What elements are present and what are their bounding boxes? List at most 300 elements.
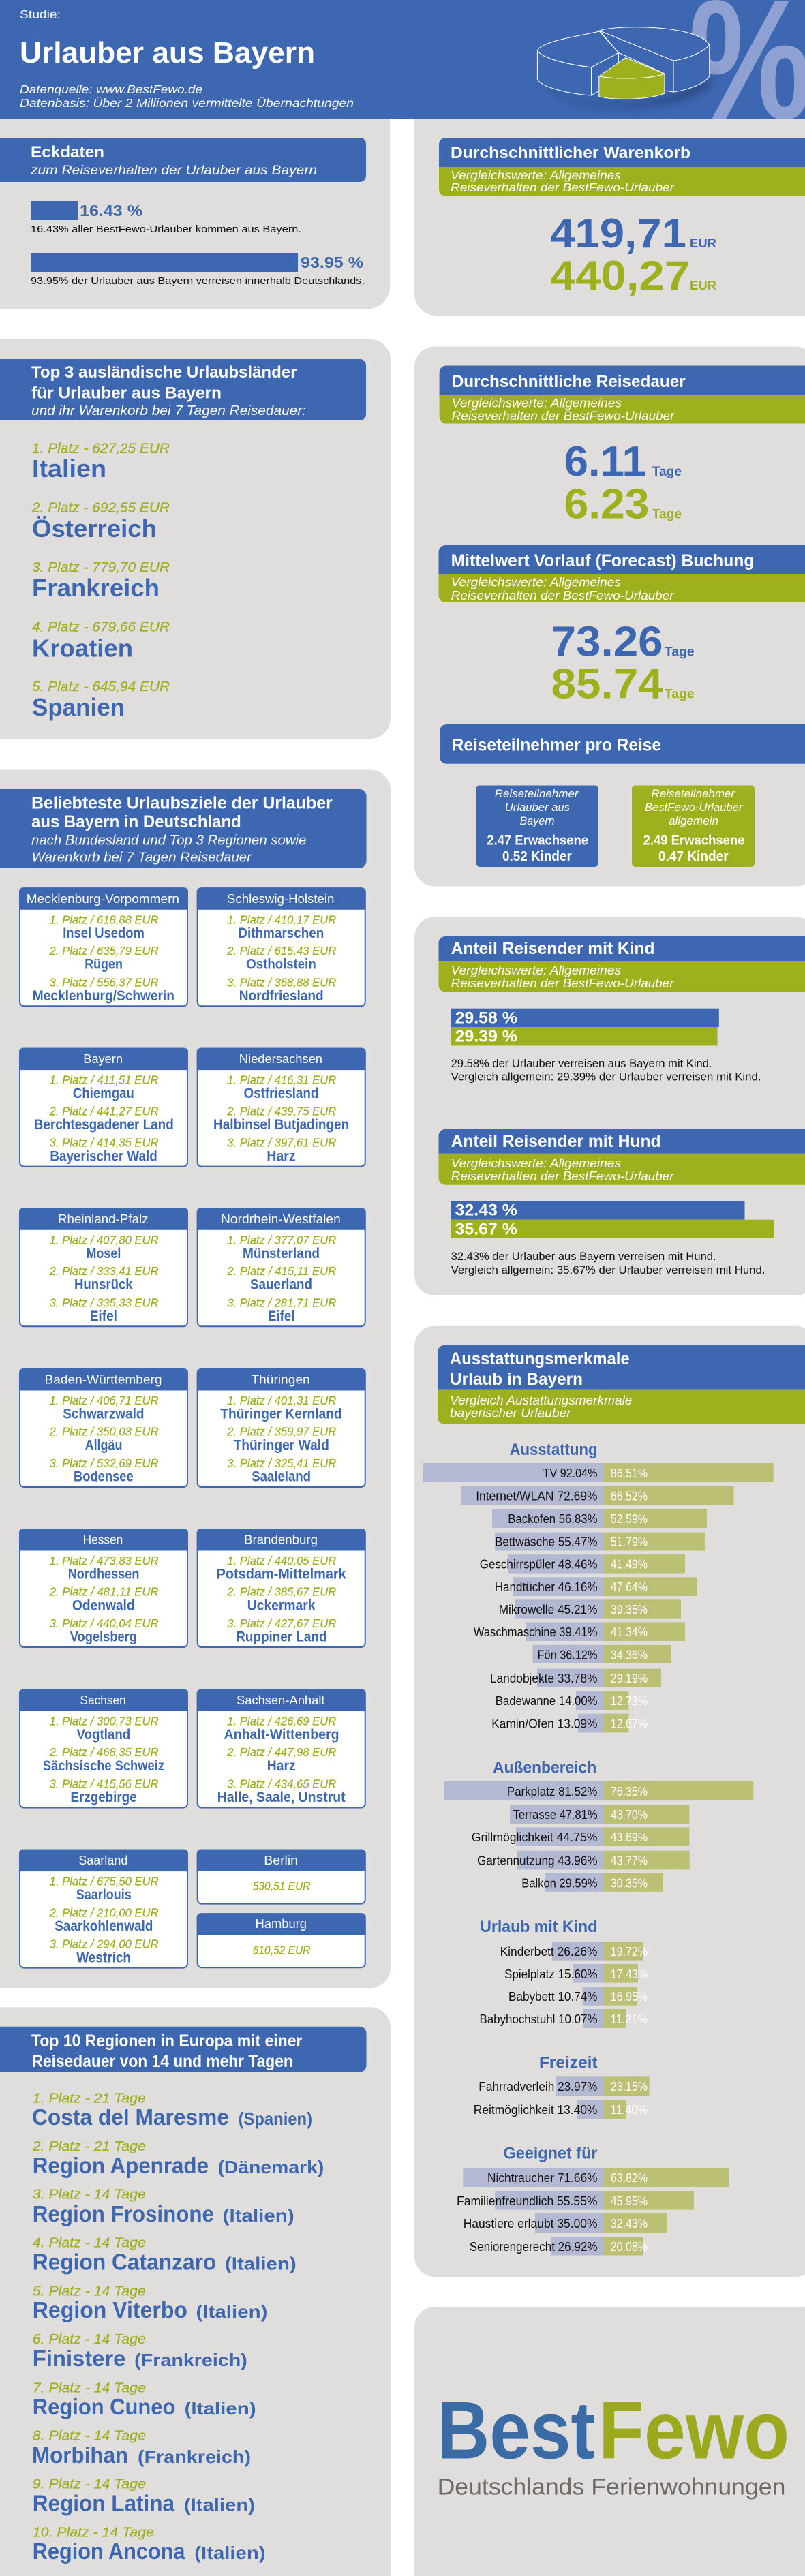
heading: Warenkorb: Durchschnittlicher Warenkorb [451, 144, 690, 162]
rank 3: Region Frosinone: (Italien) [223, 2205, 294, 2226]
chart: Ausstattung: 86.51% [611, 1467, 648, 1480]
card: Bayern: Chiemgau [73, 1086, 134, 1101]
rank 1: Costa del Maresme [32, 2091, 312, 2130]
rank 7: Region Cuneo: Region Cuneo [33, 2394, 175, 2419]
heading: Warenkorb: Vergleichswerte: Allgemeines [451, 168, 621, 182]
heading: Beliebteste Urlaubsziele: aus Bayern in Deutschland [31, 812, 241, 831]
card: Schleswig-Holstein: 3. Platz / 368,88 EUR [227, 975, 337, 989]
chart: Außenbereich: Gartennutzung 43.96% [477, 1854, 597, 1867]
data source: Datenquelle: www.BestFewo.de [20, 82, 202, 96]
heading: Beliebteste Urlaubsziele: Warenkorb bei 7 Tagen Reisedauer [31, 849, 252, 865]
card: Nordrhein-Westfalen: 2. Platz / 415,11 EUR [226, 1264, 337, 1278]
heading: Warenkorb: Reiseverhalten der BestFewo-Urlauber [451, 181, 675, 194]
card: Hessen: 1. Platz / 473,83 EUR [50, 1554, 159, 1567]
value: 6.11 Tage: 6.11 [564, 438, 646, 485]
caption: Kind: Vergleich allgemein: 29.39% der Urlauber verreisen mit Kind. [451, 1071, 761, 1084]
box: BestFewo-Urlauber allgemein: Reiseteilnehmer [652, 787, 735, 800]
bars: Hund [451, 1201, 774, 1239]
value: 73.26 Tage: 73.26 [551, 619, 663, 666]
chart: Ausstattung: 51.79% [611, 1535, 648, 1548]
card: Hessen: 3. Platz / 440,04 EUR [50, 1616, 159, 1630]
panel: Eckdaten [0, 119, 390, 309]
rank 8: Morbihan: (Frankreich) [138, 2447, 251, 2467]
chart: Außenbereich: 43.77% [611, 1854, 648, 1867]
chart: Ausstattung: Mikrowelle 45.21% [499, 1603, 597, 1616]
rank 3: Frankreich: Frankreich [32, 574, 160, 602]
card: Sachsen: 2. Platz / 468,35 EUR [49, 1745, 159, 1759]
chart: Freizeit: Reitmöglichkeit 13.40% [474, 2103, 597, 2117]
heading: Ausstattungsmerkmale: bayerischer Urlauber [450, 1406, 571, 1420]
chart: Freizeit: Freizeit [539, 2054, 597, 2072]
card: Rheinland-Pfalz: 3. Platz / 335,33 EUR [50, 1295, 159, 1309]
heading: Beliebteste Urlaubsziele [0, 789, 367, 868]
card: Sachsen-Anhalt: 2. Platz / 447,98 EUR [226, 1745, 337, 1759]
card: Niedersachsen: Ostfriesland [244, 1086, 318, 1101]
card: Saarland: 1. Platz / 675,50 EUR [50, 1875, 159, 1888]
card: Mecklenburg-Vorpommern: Mecklenburg/Schwerin [33, 988, 174, 1004]
card: Mecklenburg-Vorpommern: 2. Platz / 635,79 EUR [49, 944, 159, 957]
chart: Ausstattung: Fön 36.12% [538, 1648, 597, 1661]
chart: Ausstattung: 41.34% [611, 1625, 648, 1639]
chart: Geeignet für: 63.82% [611, 2171, 648, 2185]
rank 7: Region Cuneo [33, 2380, 256, 2419]
heading: Anteil Reisender mit Kind: Vergleichswerte: Allgemeines [451, 964, 621, 977]
box: Urlauber aus Bayern: 2.47 Erwachsene [487, 833, 588, 848]
chart: Ausstattung: Landobjekte 33.78% [490, 1672, 597, 1685]
heading: Top 10 Regionen [0, 2027, 367, 2072]
card: Sachsen [19, 1689, 188, 1807]
card: Hessen: Nordhessen [68, 1566, 139, 1582]
card: Sachsen: 3. Platz / 415,56 EUR [50, 1777, 159, 1791]
rank 2: Region Apenrade: (Dänemark) [218, 2157, 324, 2177]
rank 6: Finistere: Finistere [33, 2346, 125, 2371]
heading: Eckdaten [0, 138, 366, 182]
card: Schleswig-Holstein: Ostholstein [246, 957, 316, 972]
card: Thüringen: Thüringen [252, 1373, 310, 1386]
chart: Ausstattung: 39.35% [611, 1603, 648, 1616]
card: Niedersachsen: Harz [267, 1148, 296, 1164]
rank 9: Region Latina [33, 2477, 255, 2516]
chart: Freizeit: 23.15% [611, 2080, 648, 2094]
bar: 16.43 percent [31, 201, 301, 235]
card: Hessen: Vogelsberg [70, 1629, 137, 1645]
rank 9: Region Latina: (Italien) [184, 2494, 255, 2515]
card: Brandenburg: Brandenburg [244, 1532, 318, 1547]
card: Sachsen-Anhalt [197, 1689, 366, 1807]
card: Schleswig-Holstein: Schleswig-Holstein [227, 891, 334, 906]
chart: Geeignet für: Haustiere erlaubt 35.00% [464, 2217, 597, 2230]
card: Schleswig-Holstein [197, 887, 366, 1006]
chart: Freizeit: Fahrradverleih 23.97% [479, 2080, 597, 2094]
value: 6.11 Tage [564, 438, 682, 485]
card: Rheinland-Pfalz: 2. Platz / 333,41 EUR [49, 1264, 159, 1278]
heading: Ausstattungsmerkmale: Urlaub in Bayern [450, 1370, 583, 1389]
card: Schleswig-Holstein: Nordfriesland [239, 988, 324, 1004]
card: Sachsen-Anhalt: Sachsen-Anhalt [237, 1693, 325, 1707]
value: 6.11 Tage: Tage [652, 465, 682, 479]
chart: Ausstattung: 34.36% [611, 1648, 648, 1661]
card: Baden-Württemberg: 3. Platz / 532,69 EUR [50, 1456, 159, 1470]
rank 6: Finistere: 6. Platz - 14 Tage [33, 2332, 146, 2347]
main title: Urlauber aus Bayern [20, 36, 315, 70]
rank 6: Finistere [33, 2332, 247, 2371]
rank 10: Region Ancona: (Italien) [194, 2543, 265, 2563]
card: Brandenburg: 1. Platz / 440,05 EUR [227, 1554, 337, 1567]
box: Urlauber aus Bayern [476, 785, 598, 867]
rank 8: Morbihan: 8. Platz - 14 Tage [33, 2429, 146, 2444]
heading: Anteil Reisender mit Kind: Anteil Reisender mit Kind [451, 939, 654, 958]
study label: Studie: [20, 7, 61, 21]
card: Baden-Württemberg: Baden-Württemberg [45, 1373, 162, 1386]
chart: Ausstattung: 47.64% [611, 1580, 648, 1594]
rank 3: Region Frosinone [33, 2188, 294, 2226]
chart: Urlaub mit Kind: 16.95% [611, 1990, 648, 2004]
card: Sachsen: Erzgebirge [71, 1790, 137, 1805]
chart: Ausstattung: Waschmaschine 39.41% [474, 1625, 597, 1639]
caption: Hund: 32.43% der Urlauber aus Bayern verreisen mit Hund. [451, 1251, 716, 1263]
rank 2: Region Apenrade: Region Apenrade [33, 2153, 209, 2178]
chart: Ausstattung [423, 1441, 774, 1732]
card: Hamburg: 610,52 EUR [253, 1943, 311, 1957]
chart: Außenbereich [444, 1758, 753, 1892]
card: Berlin [197, 1850, 366, 1904]
card: Niedersachsen: 2. Platz / 439,75 EUR [226, 1104, 337, 1118]
rank 4: Region Catanzaro: Region Catanzaro [33, 2249, 216, 2275]
rank 3: Frankreich: 3. Platz - 779,70 EUR [32, 559, 170, 575]
box: Urlauber aus Bayern: Reiseteilnehmer [495, 787, 579, 800]
chart: Geeignet für: 45.95% [611, 2194, 648, 2208]
card: Mecklenburg-Vorpommern: 1. Platz / 618,88 EUR [50, 913, 159, 926]
rank 5: Region Viterbo: 5. Platz - 14 Tage [33, 2284, 146, 2299]
card: Saarland: Saarland [78, 1853, 127, 1867]
card: Rheinland-Pfalz [19, 1208, 188, 1326]
panel: Ausstattungsmerkmale [414, 1326, 805, 2277]
box: Urlauber aus Bayern: 0.52 Kinder [502, 849, 572, 864]
card: Bayern: 1. Platz / 411,51 EUR [50, 1073, 159, 1087]
chart: Urlaub mit Kind: Urlaub mit Kind [480, 1918, 597, 1936]
chart: Ausstattung: 41.49% [611, 1557, 648, 1571]
chart: Geeignet für: 20.08% [611, 2240, 648, 2254]
rank 4: Region Catanzaro: (Italien) [225, 2253, 297, 2273]
heading: Warenkorb [439, 138, 805, 196]
card: Nordrhein-Westfalen: Münsterland [243, 1246, 320, 1261]
card: Hessen: Hessen [83, 1532, 123, 1547]
card: Sachsen: Sachsen [80, 1693, 126, 1707]
rank 7: Region Cuneo: (Italien) [185, 2398, 256, 2419]
card: Brandenburg: Uckermark [247, 1597, 316, 1613]
chart: Ausstattung: Internet/WLAN 72.69% [476, 1490, 597, 1503]
card: Bayern [19, 1048, 188, 1167]
bar: 93.95 percent: 93.95 % [301, 254, 363, 271]
chart: Außenbereich: Parkplatz 81.52% [507, 1785, 597, 1798]
heading: Mittelwert Vorlauf [439, 545, 805, 602]
logo: BestFewo: Fewo [598, 2385, 789, 2477]
card: Niedersachsen: Halbinsel Butjadingen [213, 1117, 349, 1133]
panel: Reisedauer, Vorlauf, Reiseteilnehmer [414, 346, 805, 886]
card: Nordrhein-Westfalen: 1. Platz / 377,07 EUR [227, 1233, 337, 1246]
heading: Top 3 [0, 359, 366, 420]
chart: Ausstattung: 52.59% [611, 1512, 648, 1526]
icon: 3D pie chart [537, 27, 716, 106]
card: Bayern: Berchtesgadener Land [34, 1117, 174, 1133]
chart: Geeignet für: Seniorengerecht 26.92% [470, 2240, 597, 2254]
value: 85.74 Tage: Tage [665, 688, 695, 702]
heading: Eckdaten: Eckdaten [31, 143, 104, 162]
card: Rheinland-Pfalz: Eifel [90, 1308, 117, 1324]
card: Bayern: 3. Platz / 414,35 EUR [50, 1136, 159, 1150]
rank 5: Region Viterbo: (Italien) [196, 2301, 267, 2322]
heading: Durchschnittliche Reisedauer [440, 365, 805, 424]
value: 6.23 Tage: 6.23 [564, 480, 649, 527]
bar: 93.95 percent: 93.95% der Urlauber aus Bayern verreisen innerhalb Deutschlands. [31, 276, 365, 287]
rank 4: Kroatien: Kroatien [32, 634, 133, 662]
panel: Warenkorb [414, 119, 805, 316]
heading: Ausstattungsmerkmale [438, 1345, 805, 1424]
rank 1: Italien [32, 440, 170, 482]
box: BestFewo-Urlauber allgemein: BestFewo-Urlauber [645, 801, 744, 814]
card: Saarland: Saarlouis [76, 1887, 132, 1903]
heading: Durchschnittliche Reisedauer: Reiseverhalten der BestFewo-Urlauber [452, 410, 675, 423]
chart: Ausstattung: Backofen 56.83% [508, 1512, 597, 1526]
box: BestFewo-Urlauber allgemein: 0.47 Kinder [658, 849, 729, 864]
rank 9: Region Latina: 9. Platz - 14 Tage [33, 2477, 146, 2491]
card: Nordrhein-Westfalen: 3. Platz / 281,71 EUR [227, 1295, 337, 1309]
box: Urlauber aus Bayern: Bayern [520, 814, 555, 827]
rank 4: Kroatien: 4. Platz - 679,66 EUR [32, 619, 170, 635]
rank 5: Spanien [32, 679, 170, 721]
logo: BestFewo: Best [437, 2385, 595, 2477]
rank 10: Region Ancona: Region Ancona [33, 2539, 185, 2564]
box: BestFewo-Urlauber allgemein [632, 785, 755, 867]
rank 5: Spanien: Spanien [32, 693, 125, 721]
card: Thüringen: Thüringer Wald [234, 1437, 329, 1453]
heading: Top 10 Regionen: Top 10 Regionen in Europa mit einer [31, 2031, 303, 2051]
chart: Ausstattung: Geschirrspüler 48.46% [480, 1557, 597, 1571]
chart: Urlaub mit Kind: Babyhochstuhl 10.07% [480, 2012, 597, 2026]
card: Mecklenburg-Vorpommern: 3. Platz / 556,37 EUR [50, 975, 159, 989]
value: 419,71 EUR: EUR [690, 236, 716, 250]
card: Baden-Württemberg [19, 1368, 188, 1487]
rank 8: Morbihan [32, 2429, 251, 2468]
chart: Geeignet für: Familienfreundlich 55.55% [457, 2194, 597, 2208]
box: Urlauber aus Bayern: Urlauber aus [505, 801, 570, 814]
card: Niedersachsen: Niedersachsen [239, 1052, 322, 1066]
card: Sachsen-Anhalt: Anhalt-Wittenberg [224, 1727, 339, 1743]
value: 440,27 EUR: 440,27 [550, 253, 690, 298]
rank 2: Region Apenrade: 2. Platz - 21 Tage [32, 2139, 146, 2154]
chart: Freizeit [474, 2054, 650, 2119]
card: Hessen: Odenwald [72, 1597, 135, 1613]
heading: Beliebteste Urlaubsziele: Beliebteste Urlaubsziele der Urlauber [31, 793, 333, 812]
card: Mecklenburg-Vorpommern: Mecklenburg-Vorpommern [27, 891, 179, 906]
card: Berlin: 530,51 EUR [253, 1880, 311, 1893]
card: Saarland: 2. Platz / 210,00 EUR [49, 1905, 159, 1919]
card: Nordrhein-Westfalen: Sauerland [250, 1277, 312, 1293]
heading: Anteil Reisender mit Hund: Anteil Reisender mit Hund [451, 1132, 661, 1151]
data source: Datenbasis: Über 2 Millionen vermittelte Übernachtungen [20, 96, 354, 110]
value: 6.23 Tage: Tage [652, 507, 682, 521]
rank 7: Region Cuneo: 7. Platz - 14 Tage [33, 2380, 146, 2395]
card: Baden-Württemberg: Schwarzwald [63, 1407, 145, 1422]
bar: 16.43 percent: 16.43% aller BestFewo-Urlauber kommen aus Bayern. [31, 224, 301, 235]
card: Rheinland-Pfalz: 1. Platz / 407,80 EUR [50, 1233, 159, 1246]
rank 2: Region Apenrade [32, 2139, 324, 2178]
rank 2: Österreich [31, 500, 170, 542]
card: Sachsen-Anhalt: 1. Platz / 426,69 EUR [227, 1715, 337, 1728]
card: Hamburg [197, 1913, 366, 1967]
heading: Anteil Reisender mit Hund: Vergleichswerte: Allgemeines [451, 1156, 621, 1170]
rank 8: Morbihan: Morbihan [32, 2442, 128, 2468]
card: Hamburg: Hamburg [256, 1916, 307, 1931]
chart: Außenbereich: 76.35% [611, 1785, 648, 1798]
card: Thüringen: 3. Platz / 325,41 EUR [227, 1456, 337, 1470]
card: Niedersachsen: 1. Platz / 416,31 EUR [227, 1073, 337, 1087]
chart: Ausstattung: 29.19% [611, 1672, 648, 1685]
heading: Anteil Reisender mit Kind: Reiseverhalten der BestFewo-Urlauber [451, 977, 675, 990]
card: Saarland: Westrich [76, 1950, 131, 1965]
card: Mecklenburg-Vorpommern: Insel Usedom [63, 925, 145, 941]
caption: Hund: Vergleich allgemein: 35.67% der Urlauber verreisen mit Hund. [451, 1264, 765, 1276]
card: Thüringen: Saaleland [252, 1469, 311, 1485]
rank 3: Region Frosinone: Region Frosinone [33, 2201, 214, 2226]
rank 6: Finistere: (Frankreich) [134, 2350, 247, 2370]
rank 10: Region Ancona: 10. Platz - 14 Tage [33, 2526, 154, 2541]
rank 1: Italien: 1. Platz - 627,25 EUR [32, 440, 170, 457]
heading: Reiseteilnehmer pro Reise: Reiseteilnehmer pro Reise [452, 736, 661, 755]
card: Saarland [19, 1850, 188, 1968]
bars: Hund: 35.67 % [455, 1220, 517, 1239]
rank 5: Region Viterbo [33, 2284, 268, 2322]
chart: Ausstattung: Handtücher 46.16% [495, 1580, 597, 1594]
caption: Kind: 29.58% der Urlauber verreisen aus Bayern mit Kind. [451, 1058, 712, 1070]
chart: Urlaub mit Kind: Kinderbett 26.26% [500, 1945, 597, 1959]
caption: Hund [451, 1251, 765, 1276]
box: BestFewo-Urlauber allgemein: 2.49 Erwachsene [643, 833, 744, 848]
heading: Durchschnittliche Reisedauer: Durchschnittliche Reisedauer [452, 372, 686, 391]
bars: Kind: 29.39 % [455, 1028, 517, 1046]
chart: Geeignet für [457, 2144, 729, 2256]
heading: Reiseteilnehmer pro Reise [440, 724, 805, 764]
card: Sachsen: Sächsische Schweiz [43, 1758, 164, 1774]
panel: Top 10 Regionen [0, 2007, 391, 2576]
card: Schleswig-Holstein: 1. Platz / 410,17 EUR [227, 913, 337, 926]
bars: Kind [451, 1009, 719, 1046]
rank 4: Region Catanzaro [33, 2235, 297, 2275]
rank 4: Kroatien [32, 619, 170, 662]
heading: Anteil Reisender mit Hund: Reiseverhalten der BestFewo-Urlauber [451, 1169, 675, 1183]
card: Bayern: Bayern [83, 1052, 123, 1066]
chart: Außenbereich: 30.35% [611, 1876, 648, 1890]
card: Sachsen: Vogtland [76, 1727, 130, 1743]
card: Schleswig-Holstein: 2. Platz / 615,43 EUR [226, 944, 337, 957]
heading: Top 3: für Urlauber aus Bayern [31, 384, 222, 402]
card: Saarland: 3. Platz / 294,00 EUR [50, 1937, 159, 1951]
heading: Mittelwert Vorlauf: Reiseverhalten der BestFewo-Urlauber [451, 589, 675, 602]
heading: Eckdaten: zum Reiseverhalten der Urlauber aus Bayern [30, 164, 317, 178]
card: Baden-Württemberg: 1. Platz / 406,71 EUR [50, 1394, 159, 1407]
chart: Ausstattung: Badewanne 14.00% [496, 1694, 597, 1708]
chart: Ausstattung: Ausstattung [510, 1441, 597, 1459]
header banner [0, 0, 805, 119]
card: Mecklenburg-Vorpommern: Rügen [85, 957, 123, 972]
card: Sachsen-Anhalt: 3. Platz / 434,65 EUR [227, 1777, 337, 1791]
panel: Anteil Reisender [414, 917, 805, 1295]
chart: Geeignet für: Nichtraucher 71.66% [487, 2171, 597, 2185]
chart: Außenbereich: 43.69% [611, 1830, 648, 1844]
card: Thüringen: 2. Platz / 359,97 EUR [226, 1425, 337, 1439]
chart: Urlaub mit Kind: 11.21% [611, 2012, 648, 2026]
card: Thüringen [197, 1368, 366, 1487]
value: 85.74 Tage: 85.74 [551, 661, 663, 708]
heading: Beliebteste Urlaubsziele: nach Bundesland und Top 3 Regionen sowie [31, 832, 306, 848]
panel: Beliebteste Urlaubsziele [0, 770, 391, 1988]
heading: Top 10 Regionen: Reisedauer von 14 und mehr Tagen [31, 2052, 293, 2071]
bars: Kind: 29.58 % [455, 1009, 517, 1028]
box: BestFewo-Urlauber allgemein: allgemein [669, 814, 718, 827]
card: Hessen [19, 1529, 188, 1647]
rank 5: Region Viterbo: Region Viterbo [33, 2297, 187, 2322]
card: Saarland: Saarkohlenwald [55, 1918, 153, 1934]
card: Niedersachsen: 3. Platz / 397,61 EUR [227, 1136, 337, 1150]
rank 3: Region Frosinone: 3. Platz - 14 Tage [33, 2188, 146, 2203]
card: Brandenburg: 3. Platz / 427,67 EUR [227, 1616, 337, 1630]
card: Bayern: 2. Platz / 441,27 EUR [49, 1104, 159, 1118]
rank 9: Region Latina: Region Latina [33, 2490, 175, 2516]
panel: Top 3 Urlaubsländer [0, 339, 391, 739]
value: 73.26 Tage: Tage [665, 645, 695, 660]
logo: BestFewo: Deutschlands Ferienwohnungen [438, 2474, 785, 2500]
chart: Außenbereich: Grillmöglichkeit 44.75% [472, 1830, 597, 1844]
card: Sachsen-Anhalt: Halle, Saale, Unstrut [217, 1790, 346, 1805]
rank 1: Italien: Italien [32, 455, 106, 482]
heading: Mittelwert Vorlauf: Mittelwert Vorlauf (Forecast) Buchung [451, 551, 754, 570]
card: Nordrhein-Westfalen: Eifel [268, 1308, 294, 1324]
card: Rheinland-Pfalz: Mosel [86, 1246, 121, 1261]
rank 5: Spanien: 5. Platz - 645,94 EUR [32, 679, 170, 694]
card: Sachsen-Anhalt: Harz [267, 1758, 296, 1774]
chart: Urlaub mit Kind: Spielplatz 15.60% [504, 1967, 597, 1981]
bar: 93.95 percent [31, 253, 365, 287]
card: Mecklenburg-Vorpommern [19, 887, 188, 1006]
heading: Mittelwert Vorlauf: Vergleichswerte: Allgemeines [451, 576, 621, 589]
panel: BestFewo logo [414, 2307, 805, 2576]
chart: Geeignet für: Geeignet für [503, 2144, 597, 2163]
card: Brandenburg: 2. Platz / 385,67 EUR [226, 1585, 337, 1599]
card: Schleswig-Holstein: Dithmarschen [238, 925, 324, 941]
chart: Urlaub mit Kind: 17.43% [611, 1967, 648, 1981]
bar: 16.43 percent: 16.43 % [80, 202, 142, 219]
rank 3: Frankreich [32, 559, 170, 602]
rank 1: Costa del Maresme: (Spanien) [239, 2109, 312, 2129]
chart: Ausstattung: Bettwäsche 55.47% [495, 1535, 597, 1548]
chart: Außenbereich: 43.70% [611, 1808, 648, 1822]
card: Niedersachsen [197, 1048, 366, 1167]
card: Hessen: 2. Platz / 481,11 EUR [49, 1585, 159, 1599]
card: Rheinland-Pfalz: Rheinland-Pfalz [58, 1212, 149, 1226]
chart: Urlaub mit Kind: 19.72% [611, 1945, 648, 1959]
logo: BestFewo [437, 2385, 789, 2500]
heading: Top 3: Top 3 ausländische Urlaubsländer [31, 363, 297, 382]
card: Thüringen: Thüringer Kernland [220, 1407, 342, 1422]
rank 10: Region Ancona [33, 2526, 265, 2564]
chart: Außenbereich: Balkon 29.59% [521, 1876, 597, 1890]
card: Thüringen: 1. Platz / 401,31 EUR [227, 1394, 337, 1407]
rank 1: Costa del Maresme: Costa del Maresme [32, 2104, 229, 2130]
chart: Ausstattung: 66.52% [611, 1490, 648, 1503]
heading: Anteil Reisender mit Kind [439, 936, 805, 992]
card: Brandenburg: Potsdam-Mittelmark [217, 1566, 346, 1582]
card: Baden-Württemberg: Bodensee [74, 1469, 134, 1485]
